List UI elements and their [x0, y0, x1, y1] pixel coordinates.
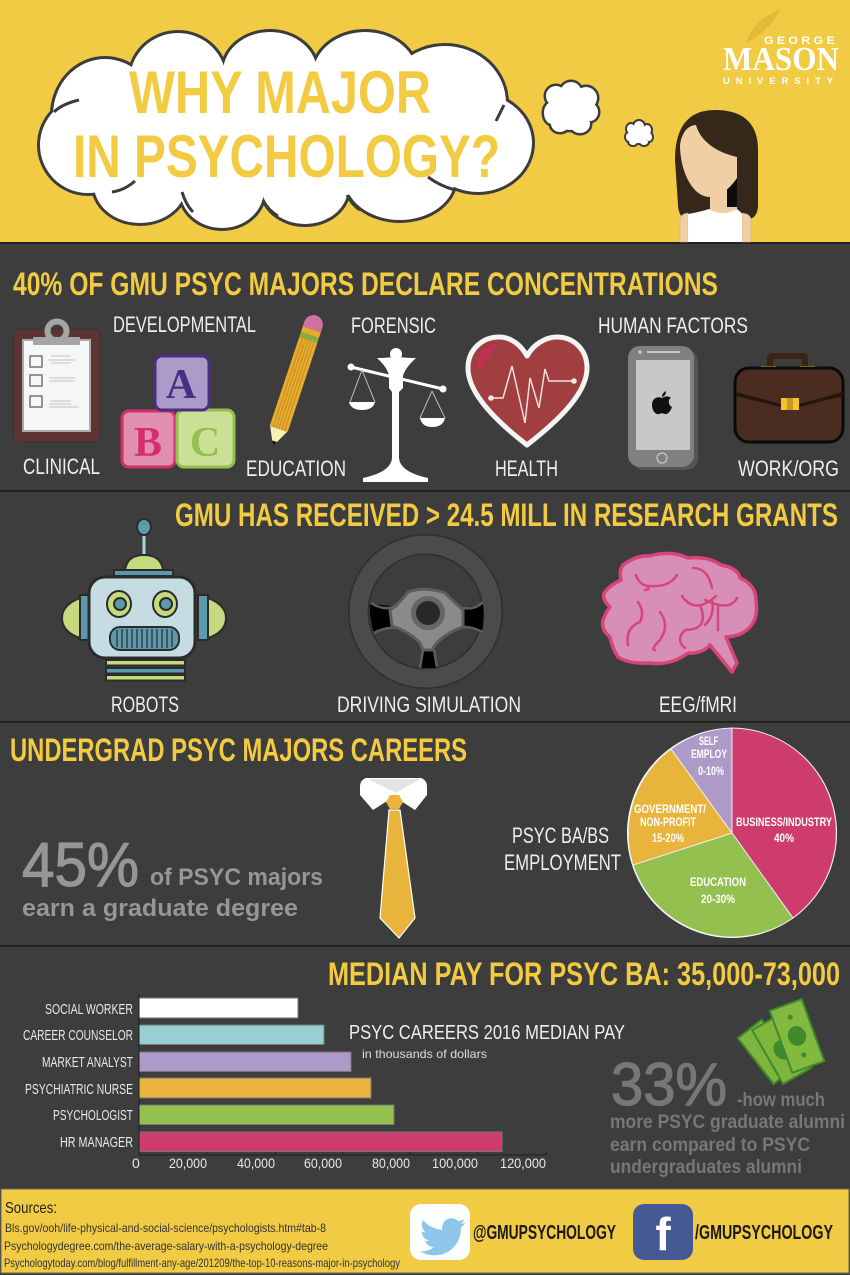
stat: 45 percent: 45% — [22, 831, 139, 900]
bar chart: median pay: CAREER COUNSELOR — [23, 1027, 133, 1044]
icon: brain — [603, 553, 757, 672]
stat: 33 percent: -how much — [737, 1090, 825, 1111]
icon: alphabet blocks: A — [166, 362, 197, 408]
heading: careers: UNDERGRAD PSYC MAJORS CAREERS — [10, 732, 467, 768]
panel: concentrations — [13, 266, 843, 482]
icon: facebook — [633, 1204, 693, 1260]
icon: tie and collar — [360, 778, 427, 938]
icon: smartphone — [628, 346, 698, 470]
bar chart: median pay — [23, 994, 546, 1171]
label: eeg/fmri: EEG/fMRI — [659, 692, 737, 717]
pie chart: employment: GOVERNMENT/ — [634, 802, 707, 816]
panel: research grants — [62, 497, 838, 717]
label: human factors: HUMAN FACTORS — [598, 313, 748, 338]
stat: 45 percent — [22, 831, 323, 922]
sources — [4, 1200, 400, 1270]
icon: facebook: f — [655, 1208, 671, 1260]
sources: Psychologydegree.com/the-average-salary-with-a-psychology-degree — [4, 1239, 328, 1253]
divider: careers section top — [0, 721, 850, 723]
bar chart: median pay: PSYCHOLOGIST — [53, 1107, 133, 1124]
label: health: HEALTH — [495, 456, 558, 481]
bar chart: median pay: PSYCHIATRIC NURSE — [25, 1081, 133, 1098]
pie chart: employment: 20-30% — [701, 892, 735, 906]
bar chart: median pay: SOCIAL WORKER — [45, 1001, 133, 1018]
logo: George Mason University: UNIVERSITY — [723, 76, 839, 87]
divider: research section top — [0, 490, 850, 492]
thought cloud — [40, 32, 532, 228]
icon: steering wheel — [358, 544, 492, 678]
label: robots: ROBOTS — [111, 692, 179, 717]
icon: robot — [62, 519, 226, 680]
icon: pencil — [264, 313, 325, 449]
pie chart: employment: EMPLOY — [691, 747, 727, 761]
pie chart: employment — [627, 728, 837, 938]
chart title: PSYC CAREERS 2016 MEDIAN PAY — [349, 1022, 625, 1044]
logo: George Mason University — [723, 9, 839, 87]
sources: Sources: — [5, 1200, 57, 1217]
pie chart: employment: NON-PROFIT — [640, 815, 696, 829]
sources: Bls.gov/ooh/life-physical-and-social-science/psychologists.htm#tab-8 — [5, 1221, 326, 1235]
pie chart: employment: 0-10% — [698, 764, 724, 778]
icon: dollar bills — [738, 999, 824, 1084]
icon: heart with pulse — [468, 337, 587, 445]
bar chart: median pay: 60,000 — [304, 1155, 342, 1171]
icon: alphabet blocks — [122, 356, 234, 467]
pie chart: employment: SELF — [699, 734, 718, 748]
icon: briefcase — [735, 353, 843, 442]
bar chart: median pay: 80,000 — [372, 1155, 410, 1171]
icon: alphabet blocks: C — [190, 420, 220, 466]
stat: 45 percent: earn a graduate degree — [22, 895, 298, 922]
label: driving simulation: DRIVING SIMULATION — [337, 692, 521, 717]
stat: 33 percent: 33% — [611, 1051, 727, 1118]
panel: footer — [1, 1189, 849, 1273]
bar chart: median pay: 0 — [132, 1155, 140, 1171]
logo: George Mason University: GEORGE — [764, 35, 838, 47]
logo: George Mason University: MASON — [723, 41, 839, 78]
stat: 33 percent — [610, 1051, 845, 1178]
woman illustration — [675, 110, 758, 242]
title: IN PSYCHOLOGY? — [73, 123, 500, 190]
label: employment — [504, 823, 621, 875]
label: employment: PSYC BA/BS — [512, 823, 609, 848]
small thought clouds — [544, 82, 652, 145]
label: forensic: FORENSIC — [351, 313, 436, 338]
chart title — [349, 1022, 625, 1061]
pie chart: employment: 40% — [774, 831, 794, 845]
panel: header — [0, 0, 850, 244]
pie chart: employment: EDUCATION — [690, 875, 746, 889]
bar chart: median pay: 20,000 — [169, 1155, 207, 1171]
label: employment: EMPLOYMENT — [504, 850, 621, 875]
label: education: EDUCATION — [246, 456, 346, 481]
bar chart: median pay: HR MANAGER — [60, 1134, 133, 1151]
bar chart: median pay: 100,000 — [432, 1155, 478, 1171]
stat: 45 percent: of PSYC majors — [150, 864, 323, 891]
divider: pay section top — [0, 945, 850, 947]
sources: Psychologytoday.com/blog/fulfillment-any-age/201209/the-top-10-reasons-major-in-psychology — [4, 1256, 400, 1270]
title — [73, 59, 500, 190]
label: clinical: CLINICAL — [23, 454, 100, 479]
label: developmental: DEVELOPMENTAL — [113, 312, 256, 337]
chart title: in thousands of dollars — [362, 1047, 487, 1061]
icon: scales of justice — [348, 348, 446, 482]
bar chart: median pay: 40,000 — [237, 1155, 275, 1171]
icon: twitter — [410, 1204, 470, 1260]
icon: clipboard — [13, 322, 100, 442]
label: twitter handle: @GMUPSYCHOLOGY — [473, 1222, 616, 1244]
bar chart: median pay: MARKET ANALYST — [42, 1054, 133, 1071]
stat: 33 percent: undergraduates alumni — [610, 1157, 802, 1178]
title: WHY MAJOR — [129, 59, 431, 126]
icon: alphabet blocks: B — [134, 420, 162, 466]
panel: median pay — [23, 956, 845, 1178]
panel: undergrad careers — [10, 728, 837, 938]
bar chart: median pay: 120,000 — [500, 1155, 546, 1171]
stat: 33 percent: earn compared to PSYC — [610, 1135, 810, 1156]
pie chart: employment: 15-20% — [652, 831, 684, 845]
